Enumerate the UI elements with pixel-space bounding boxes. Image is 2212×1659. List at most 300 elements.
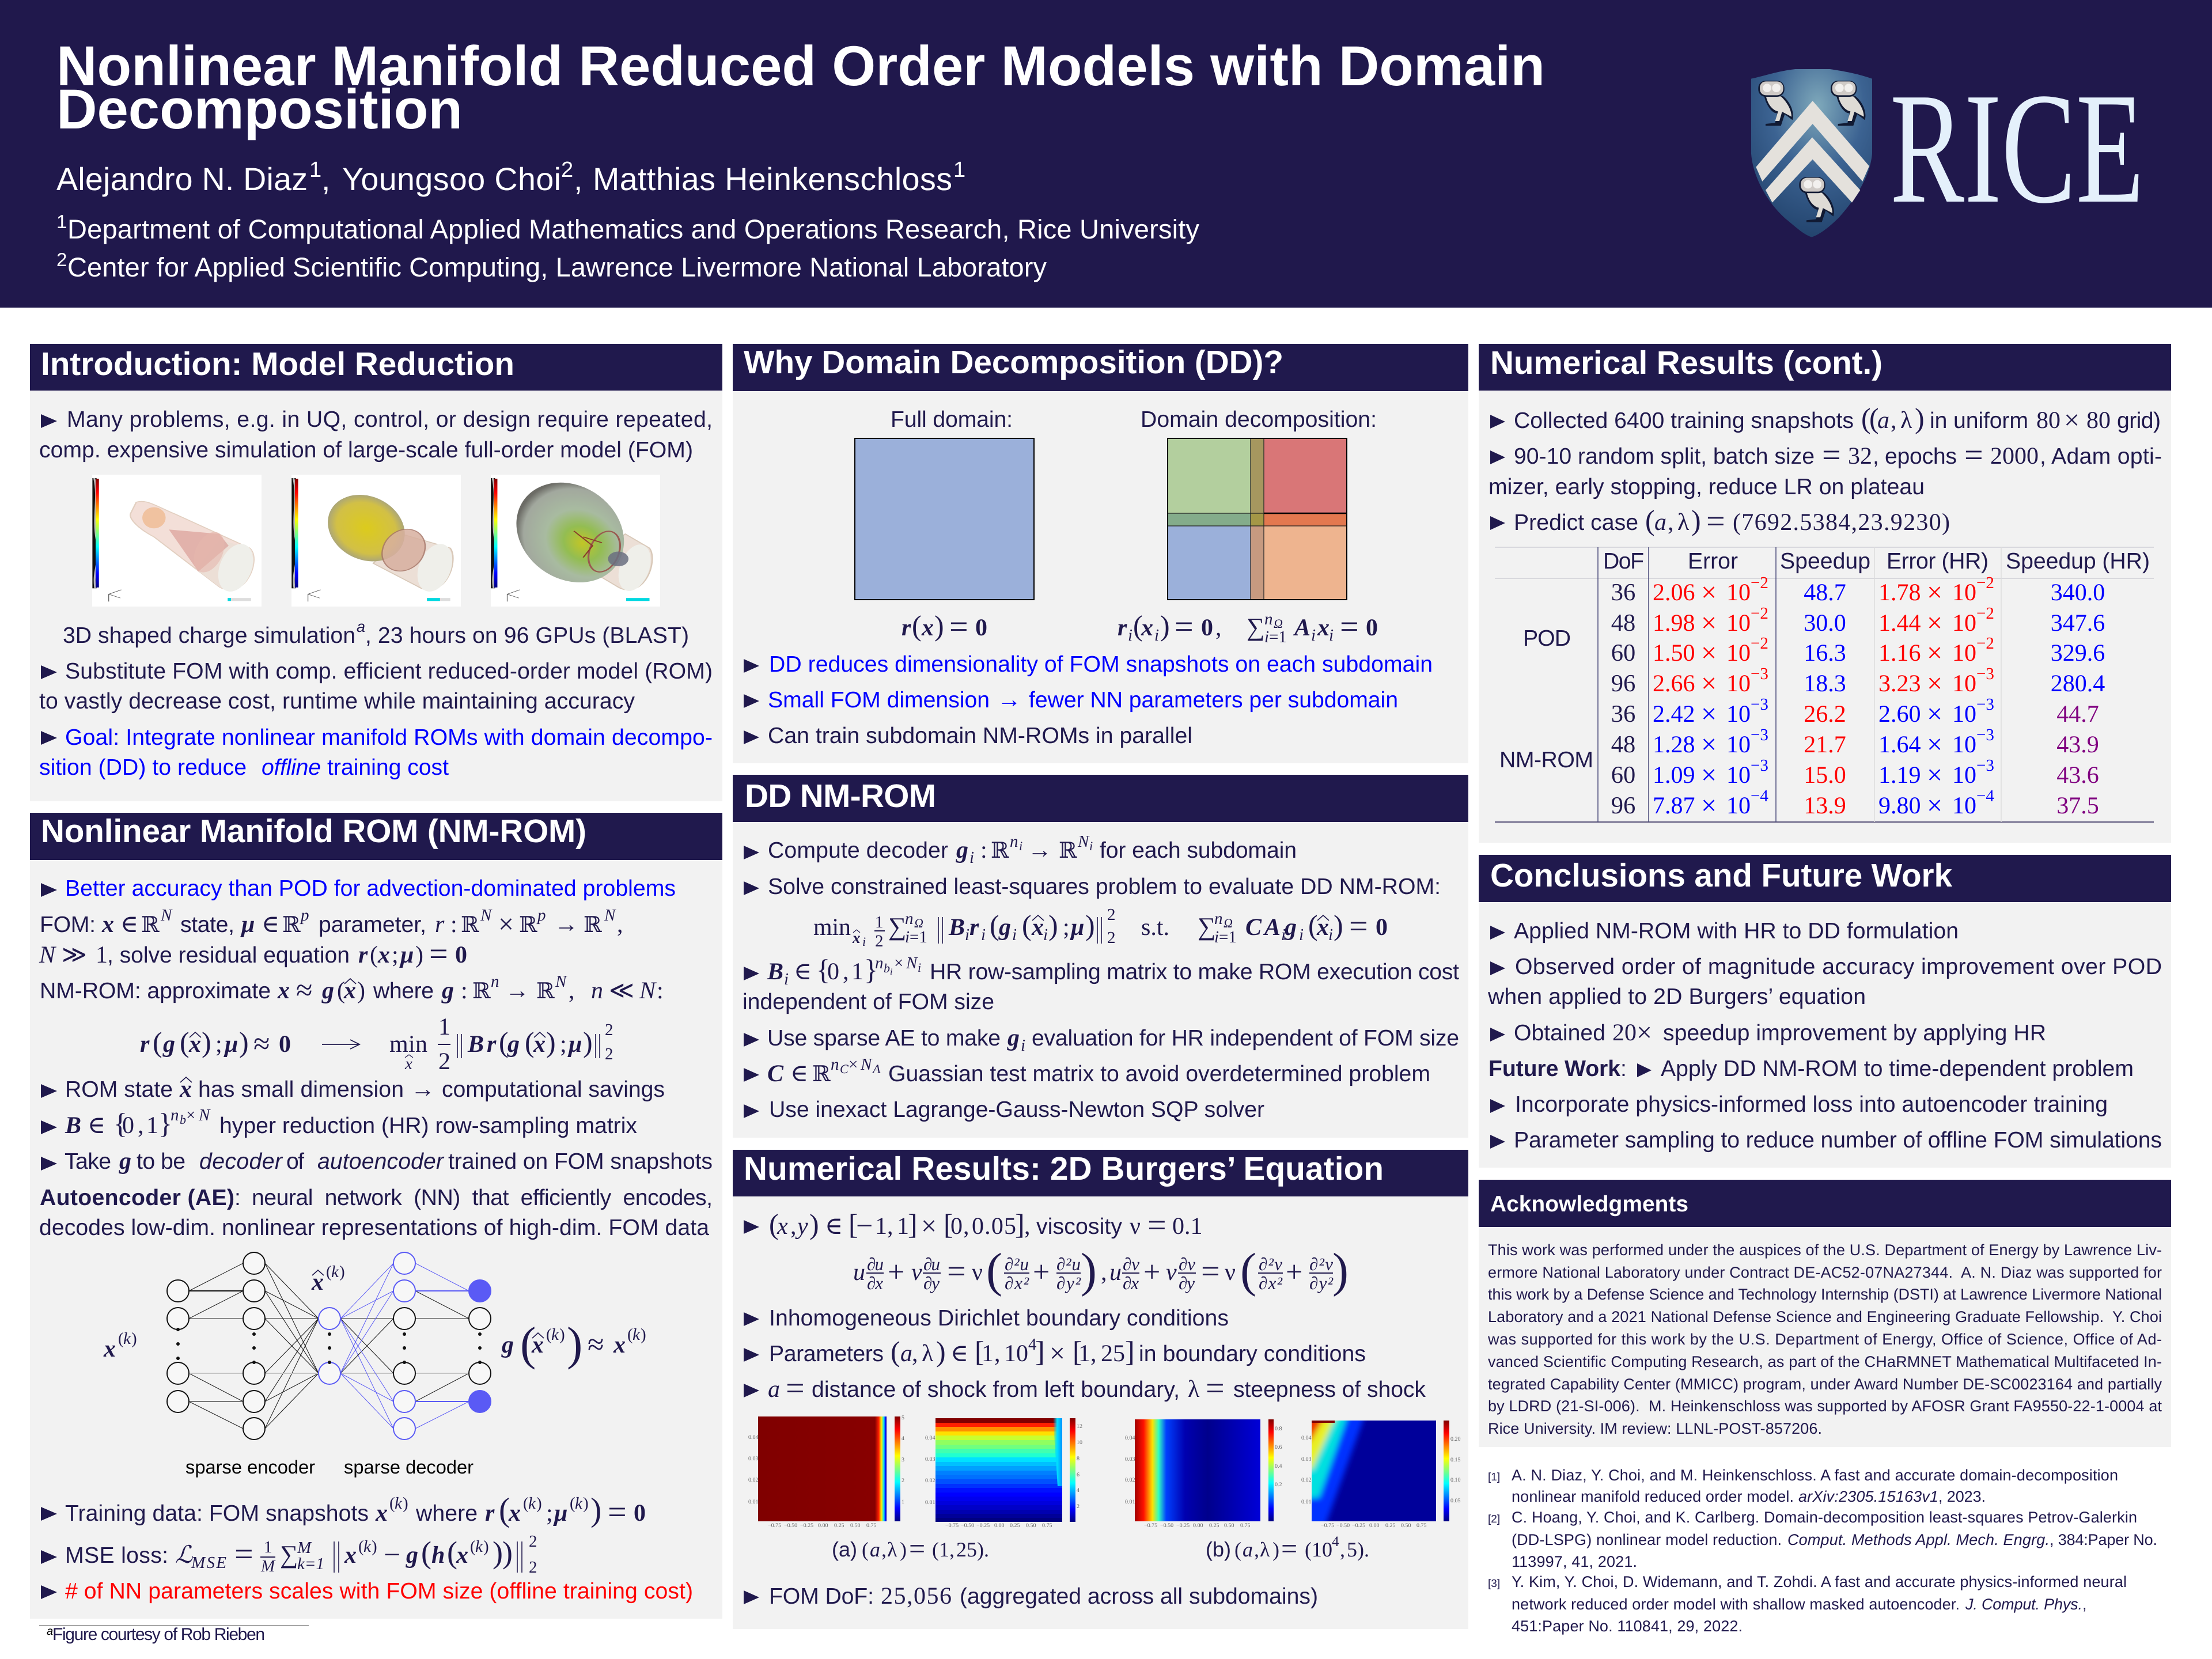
text: funding acknowledgment: was supported for this work by the U.S. Department of Energy, Office of Science, Office of Ad-: [1487, 1331, 2162, 1348]
table rows: error: −4: [1751, 787, 1768, 805]
chart: FOM solution v for case b: 0.04: [1301, 1435, 1311, 1441]
bullet: MSE loss: ): [372, 1537, 377, 1556]
text: FOM definition: parameter,: [319, 912, 426, 937]
equation: subdomain residual and interface constraint: x: [1317, 615, 1330, 641]
bullet: B_i sampling matrix: n: [875, 954, 884, 972]
bullet: parameters: [744, 1335, 1366, 1369]
figure label: domain decomposition: Domain decomposition:: [1141, 407, 1377, 432]
bullet: C test matrix: N: [860, 1055, 873, 1074]
equation: 2D Burgers equation: ∂v: [1179, 1254, 1195, 1274]
table rows: error with HR: −3: [1976, 726, 1994, 744]
reference 2: , 384:Paper No.: [2050, 1531, 2157, 1548]
equation: constrained least-squares problem: (: [1308, 909, 1318, 941]
table rows: error: 2.66: [1653, 671, 1695, 697]
bullet: training hyperparameters: ,: [1873, 444, 1879, 469]
bullet: B matrix: }: [158, 1107, 172, 1139]
chart: FOM solution v for case a: [925, 1418, 1082, 1529]
text: FOM definition: N: [480, 906, 493, 925]
text: future work: Apply DD NM-ROM to time-dependent problem: [1661, 1056, 2134, 1081]
table header: Speedup (HR): [2006, 549, 2150, 574]
equation: 2D Burgers equation: +: [1143, 1256, 1160, 1288]
bullet: repeated FOM simulation: comp. expensive simulation of large-scale full-order model (FOM): [39, 438, 693, 463]
header banner: [0, 0, 2212, 308]
text: funding acknowledgment: vanced Scientific Computing Research, as part of the CHaRMNET Mathematical Multifaceted In-: [1488, 1353, 2162, 1370]
equation: constrained least-squares problem: x: [852, 929, 861, 946]
bullet: decoder of autoencoder: decoder: [199, 1149, 283, 1174]
table rows: error with HR: −3: [1976, 695, 1994, 714]
equation: 2D Burgers equation: ∂x²: [1259, 1273, 1283, 1293]
equation: constrained least-squares problem: s.t.: [1141, 914, 1169, 941]
equation: 2D Burgers equation: +: [1286, 1256, 1302, 1288]
equation: 2D Burgers equation: ∂u: [923, 1254, 940, 1274]
equation: constrained least-squares problem: 2: [1107, 906, 1115, 924]
table rows: DoF: [1611, 579, 1635, 819]
figure label: full domain: Full domain:: [891, 407, 1013, 432]
table rows: error: 10: [1726, 671, 1751, 697]
label: input x(k): k: [123, 1330, 131, 1348]
figure caption: case b: (: [1234, 1538, 1241, 1561]
table rows: error with HR: −2: [1976, 604, 1994, 623]
bullet: compute decoder: i: [969, 849, 974, 867]
bullet: MSE loss: k: [363, 1537, 372, 1556]
affiliations: [56, 211, 1199, 282]
figure caption: case a: ,: [949, 1538, 955, 1561]
bullet: parameters: ]: [1125, 1335, 1135, 1368]
bullet: B_i sampling matrix: b: [884, 961, 890, 975]
table rows: error with HR: 1.78: [1878, 579, 1921, 606]
table rows: speedup with HR: 340.0: [2051, 579, 2105, 606]
bullet: goal: sition (DD) to reduce: [39, 755, 247, 780]
table rows: DoF: 96: [1611, 670, 1635, 697]
bullet: MSE loss: 1: [264, 1538, 272, 1556]
equation: least-squares residual minimization: ≈: [253, 1028, 270, 1060]
bullet: C test matrix: A: [872, 1062, 881, 1076]
table rows: error: −3: [1751, 756, 1768, 775]
label: decoder output approximates x(k): (: [520, 1317, 536, 1370]
bullet: parameters: ]: [1035, 1335, 1045, 1368]
equation: 2D Burgers equation: ,: [1101, 1259, 1107, 1286]
bullet: MSE loss: ): [493, 1535, 503, 1570]
bullet: parameters: ,: [1090, 1340, 1097, 1367]
text: FOM definition: ℝ: [584, 912, 602, 937]
text: FOM definition: p: [300, 906, 309, 925]
text: NM-ROM approximation: ≪: [609, 978, 634, 1004]
bullet: training snapshots: λ: [1900, 407, 1912, 434]
heading: Numerical Results cont: Numerical Results (cont.): [1490, 345, 1883, 381]
bullet: B_i sampling matrix: ×: [894, 954, 903, 972]
equation: least-squares residual minimization: ): [583, 1026, 593, 1058]
text: NM-ROM approximation: :: [657, 978, 664, 1004]
bullet: predict case: Predict case: [1514, 510, 1638, 535]
text: FOM definition: ∈: [262, 911, 279, 938]
authors: [56, 158, 965, 197]
table rows: speedup with HR: 347.6: [2051, 610, 2105, 637]
bullet: goal: offline: [262, 755, 321, 780]
chart: FOM solution u for case a: −0.50: [784, 1522, 797, 1529]
diagram: sparse autoencoder network: [167, 1252, 491, 1440]
bullet: training data: 0: [634, 1500, 646, 1527]
table rows: error with HR: 2.60: [1878, 701, 1921, 728]
bullet: ROM state: [41, 1076, 665, 1103]
bullet: domain and viscosity: ,: [1024, 1213, 1030, 1240]
equation: subdomain residual and interface constraint: =1: [1269, 628, 1287, 646]
bullet: parameters: 1: [982, 1340, 994, 1367]
bullet: training snapshots: Collected 6400 training snapshots: [1514, 408, 1854, 433]
bullet: training data: ): [403, 1494, 408, 1513]
bullet: B_i sampling matrix: 1: [851, 959, 863, 985]
bullet: fewer parameters: →: [997, 687, 1021, 713]
table rows: error: 1.98: [1653, 610, 1695, 637]
bullet: C test matrix: Guassian test matrix to avoid overdetermined problem: [888, 1062, 1430, 1086]
equation: subdomain residual and interface constraint: ,: [1215, 615, 1221, 641]
text: autoencoder definition: Autoencoder (AE): [40, 1185, 234, 1210]
chart: FOM solution u for case b: 0.02: [1125, 1477, 1135, 1483]
bullet: B matrix: ∈: [88, 1112, 105, 1139]
equation: least-squares residual minimization: (: [499, 1026, 509, 1058]
bullet: substitute FOM with ROM: to vastly decrease cost, runtime while maintaining accuracy: [39, 689, 635, 714]
table rows: error: −2: [1751, 574, 1768, 592]
equation: 2D Burgers equation: =: [1201, 1252, 1220, 1290]
text: FOM definition: ∈: [120, 911, 138, 938]
text: funding acknowledgment: tegrated Capability Center (MMICC) program, under Award Number DE-SC0023164 and partially: [1488, 1376, 2162, 1393]
bullet: MSE loss: ∑: [280, 1540, 298, 1569]
text: NM-ROM approximation: where: [373, 979, 434, 1003]
chart: FOM solution v for case a: −0.75: [945, 1522, 959, 1529]
bullet: training data: k: [575, 1494, 583, 1513]
authors: Youngsoo Choi: [342, 161, 561, 197]
bullet: training data: Training data: FOM snapshots: [65, 1501, 369, 1526]
text: FOM definition: r: [435, 911, 445, 938]
equation: 2D Burgers equation: ∂v: [1123, 1254, 1139, 1274]
table rows: error: 10: [1726, 701, 1751, 728]
equation: constrained least-squares problem: ): [1334, 909, 1343, 941]
bullet: MSE loss: h: [431, 1542, 445, 1569]
equation: 2D Burgers equation: v: [911, 1259, 922, 1286]
text: NM-ROM approximation: NM-ROM: approximate: [40, 979, 271, 1003]
text: FOM definition: ×: [498, 909, 514, 939]
heading: Acknowledgments: Acknowledgments: [1490, 1192, 1688, 1217]
equation: constrained least-squares problem: Ω: [1224, 916, 1233, 930]
bullet: speedup: Obtained: [1514, 1021, 1605, 1046]
bullet: shock parameters: a: [768, 1376, 780, 1403]
bullet: training data: r: [485, 1500, 495, 1527]
equation: constrained least-squares problem: =1: [910, 928, 927, 946]
label: decoder output approximates x(k): k: [632, 1325, 641, 1344]
equation: least-squares residual minimization: ): [239, 1026, 249, 1058]
bullet: decoder of autoencoder: Take: [65, 1149, 111, 1174]
bullet: parameters: ×: [1050, 1338, 1065, 1369]
bullet: training snapshots: ): [1915, 402, 1925, 434]
chart: FOM solution u for case b: 0.00: [1193, 1522, 1203, 1529]
table rows: error with HR: 1.64: [1878, 732, 1921, 758]
bullet: B_i sampling matrix: [743, 953, 1459, 1014]
equation: 2D Burgers equation: ν: [972, 1259, 983, 1286]
text: future work: :: [1620, 1056, 1627, 1081]
table rows: speedup: 13.9: [1804, 793, 1846, 819]
bullet: training snapshots: [1490, 402, 2161, 435]
label: sparse encoder and decoder: [185, 1456, 474, 1478]
equation: 2D Burgers equation: ∂²v: [1309, 1254, 1333, 1274]
table rows: speedup: 18.3: [1804, 671, 1846, 697]
reference 2: [1488, 1509, 2157, 1570]
figure caption: case b: 4: [1332, 1534, 1339, 1550]
row label: NM-ROM: NM-ROM: [1499, 748, 1593, 772]
bullet: training snapshots: ×: [2064, 404, 2080, 435]
chart: FOM solution u for case a: 0.00: [818, 1522, 828, 1529]
bullet: decoder of autoencoder: to be: [137, 1149, 185, 1174]
chart: FOM solution v for case b: 0.00: [1369, 1522, 1379, 1529]
text: funding acknowledgment: Rice University. IM review: LLNL-POST-857206.: [1488, 1420, 1822, 1437]
text: NM-ROM approximation: ,: [569, 978, 575, 1004]
table rows: speedup with HR: 44.7: [2056, 701, 2099, 728]
table: ROM results: [1495, 547, 2154, 822]
figure caption: case a: (a): [832, 1537, 857, 1561]
bullet: FOM DoF: FOM DoF:: [769, 1584, 874, 1609]
label: input x(k): ): [131, 1330, 137, 1348]
text: FOM definition: ℝ: [282, 912, 301, 937]
text: FOM definition: state,: [180, 912, 234, 937]
table rows: error: ×: [1701, 698, 1717, 729]
equation: constrained least-squares problem: 2: [1107, 929, 1115, 947]
table rows: error: 2.06: [1653, 579, 1695, 606]
text: FOM definition: ℝ: [461, 912, 479, 937]
text: FOM definition: ℝ: [519, 912, 537, 937]
equation: 2D Burgers equation: ∂u: [867, 1254, 884, 1274]
equation: subdomain residual and interface constraint: i: [1329, 626, 1334, 645]
bullet: B_i sampling matrix: HR row-sampling matrix to make ROM execution cost: [930, 960, 1459, 984]
equation: constrained least-squares problem: i: [965, 926, 969, 944]
reference 1: [1488, 1467, 2118, 1505]
equation: least-squares residual minimization: B: [467, 1031, 484, 1058]
bullet: B matrix: 1: [146, 1112, 158, 1139]
text: funding acknowledgment: This work was performed under the auspices of the U.S. Department of Energy by Lawrence Liv-: [1488, 1241, 2162, 1259]
bullet: domain and viscosity: viscosity: [1036, 1214, 1122, 1239]
bullet: parameters: in boundary conditions: [1139, 1342, 1366, 1366]
figure caption: case b: ,: [1254, 1538, 1259, 1561]
equation: 2D Burgers equation: (: [1240, 1244, 1256, 1297]
equation: 2D Burgers equation: ∂x²: [1005, 1273, 1029, 1293]
chart: FOM solution u for case b: [1125, 1419, 1282, 1529]
equation: 2D Burgers equation: ∂x: [867, 1273, 883, 1293]
text: funding acknowledgment: [1487, 1241, 2162, 1437]
figure: 3D shaped charge simulation snapshots: [92, 475, 660, 607]
equation: constrained least-squares problem: i: [1043, 926, 1048, 944]
chart: FOM solution v for case a: 2: [1077, 1503, 1080, 1510]
bullet: training snapshots: 80: [2036, 407, 2061, 434]
bullet: domain and viscosity: ν: [1130, 1213, 1141, 1240]
equation: least-squares residual minimization: (: [153, 1026, 162, 1058]
chart: FOM solution u for case b: 0.4: [1275, 1463, 1282, 1469]
table rows: error with HR: −3: [1976, 665, 1994, 683]
label: decoder output approximates x(k): ): [559, 1325, 565, 1344]
figure caption: case b: (10: [1305, 1538, 1332, 1561]
equation: full residual: 0: [975, 615, 987, 641]
equation: constrained least-squares problem: r: [969, 914, 979, 941]
table rows: error: −3: [1751, 695, 1768, 714]
chart: FOM solution v for case b: 0.75: [1416, 1522, 1426, 1529]
bullet: ROM state: has small dimension: [198, 1077, 404, 1102]
bullet: C test matrix: C: [767, 1060, 784, 1087]
bullet: parameters: 10: [1004, 1340, 1028, 1367]
bullet: ROM state: ROM state: [65, 1077, 173, 1102]
bullet: parameters: [: [975, 1335, 984, 1368]
affiliations: Center for Applied Scientific Computing, Lawrence Livermore National Laboratory: [67, 252, 1047, 282]
equation: least-squares residual minimization: g: [507, 1031, 520, 1058]
table rows: error: 1.28: [1653, 732, 1695, 758]
bullet: training data: ): [590, 1491, 601, 1528]
label: input x(k): x: [103, 1336, 116, 1362]
table rows: error with HR: 3.23: [1878, 671, 1921, 697]
bullet: B matrix: N: [198, 1106, 211, 1124]
bullet: MSE loss: (: [421, 1535, 431, 1570]
text: FOM definition: →: [554, 911, 578, 938]
bullet: predict case: ,: [1668, 509, 1674, 536]
figure caption: case a: [832, 1532, 989, 1565]
figure caption: shaped charge: [63, 618, 689, 648]
table rows: error with HR: 9.80: [1878, 793, 1921, 819]
equation: least-squares residual minimization: μ: [224, 1031, 238, 1058]
bullet: domain and viscosity: ]: [908, 1208, 918, 1240]
chart: FOM solution v for case a: 8: [1077, 1456, 1080, 1462]
table rows: error with HR: 10: [1952, 640, 1976, 666]
authors: ,: [574, 161, 582, 197]
bullet: domain and viscosity: [: [944, 1208, 953, 1240]
chart: FOM solution v for case a: 0.25: [1010, 1522, 1020, 1529]
chart: FOM solution v for case b: 0.20: [1450, 1436, 1461, 1442]
text: FOM definition: μ: [399, 942, 414, 968]
equation: 2D Burgers equation: ∂y²: [1056, 1273, 1081, 1293]
bullet: boundary conditions: Inhomogeneous Dirichlet boundary conditions: [769, 1306, 1229, 1331]
equation: subdomain residual and interface constraint: i: [1264, 628, 1269, 646]
text: NM-ROM approximation: x: [277, 978, 290, 1004]
text: FOM definition: ;: [392, 942, 399, 968]
text: FOM definition: N: [160, 906, 173, 925]
table rows: error: −2: [1751, 634, 1768, 653]
equation: 2D Burgers equation: +: [1033, 1256, 1050, 1288]
reference 2: (DD-LSPG) nonlinear model reduction.: [1512, 1531, 1782, 1548]
chart: FOM solution u for case b: 0.8: [1275, 1426, 1282, 1432]
bullet: sparse AE: evaluation for HR independent of FOM size: [1032, 1026, 1459, 1051]
chart: FOM solution u for case a: −0.25: [800, 1522, 813, 1529]
table rows: error: ×: [1701, 637, 1717, 668]
bullet: C test matrix: n: [831, 1055, 839, 1074]
equation: full residual: (: [912, 609, 922, 642]
chart: FOM solution v for case b: 0.10: [1450, 1477, 1461, 1483]
equation: constrained least-squares problem: μ: [1070, 914, 1084, 941]
bullet: training hyperparameters: 90-10 random split, batch size: [1514, 444, 1815, 469]
equation: subdomain residual and interface constraint: ∑: [1247, 613, 1264, 641]
label: latent x-hat(k): ): [339, 1263, 345, 1281]
equation: least-squares residual minimization: 2: [438, 1048, 450, 1075]
table rows: error: ×: [1701, 577, 1717, 607]
bullet: MSE loss: k: [475, 1537, 483, 1556]
affiliations: 2: [56, 249, 67, 270]
bullet: parameters: (: [891, 1335, 900, 1368]
bullet: parallel training: Can train subdomain NM-ROMs in parallel: [768, 724, 1192, 748]
text: NM-ROM approximation: →: [505, 978, 529, 1004]
bullet: decoder of autoencoder: g: [119, 1148, 131, 1175]
table rows: error with HR: ×: [1927, 759, 1942, 790]
equation: constrained least-squares problem: i: [905, 928, 910, 946]
bullet: B_i sampling matrix: N: [906, 954, 918, 972]
bullet: training snapshots: in uniform: [1930, 408, 2028, 433]
chart: FOM solution u for case b: 0.25: [1209, 1522, 1219, 1529]
table rows: error: −3: [1751, 726, 1768, 744]
table rows: speedup: [1804, 579, 1846, 819]
label: decoder output approximates x(k): (: [546, 1325, 552, 1344]
label: input x(k): (: [118, 1330, 124, 1348]
text: NM-ROM approximation: :: [461, 978, 468, 1004]
table rows: error with HR: ×: [1927, 637, 1942, 668]
equation: subdomain residual and interface constraint: =: [1175, 608, 1194, 645]
table rows: DoF: 60: [1611, 762, 1635, 789]
bullet: SQP solver: Use inexact Lagrange-Gauss-Newton SQP solver: [769, 1097, 1264, 1122]
bullet: B matrix: hyper reduction (HR) row-sampling matrix: [219, 1113, 637, 1138]
equation: full residual: x: [921, 615, 934, 641]
bullet: predict case: a: [1654, 509, 1666, 536]
text: FOM definition: ): [415, 942, 423, 968]
chart: FOM solution v for case b: −0.50: [1336, 1522, 1350, 1529]
bullet: decoder of autoencoder: autoencoder: [317, 1149, 445, 1174]
bullet: predict case: =: [1706, 502, 1725, 540]
equation: constrained least-squares problem: ;: [1063, 914, 1070, 941]
equation: full residual: r: [902, 615, 911, 641]
bullet: domain and viscosity: 1: [875, 1213, 887, 1240]
equation: subdomain residual and interface constraint: r: [1118, 615, 1127, 641]
bullet: shock parameters: =: [1206, 1369, 1225, 1407]
table rows: speedup: 26.2: [1804, 701, 1846, 728]
references: [1488, 1467, 2157, 1635]
chart: FOM solution v for case b: 0.01: [1301, 1499, 1311, 1505]
figure caption: case a: ,: [881, 1538, 887, 1561]
label: latent x-hat(k): (: [326, 1263, 332, 1281]
table rows: error: ×: [1701, 729, 1717, 759]
bullet: parameters: 1: [1078, 1340, 1090, 1367]
table rows: speedup with HR: [2051, 579, 2105, 819]
affiliations: Department of Computational Applied Mathematics and Operations Research, Rice University: [67, 214, 1199, 244]
equation: constrained least-squares problem: ∑: [888, 912, 906, 941]
bullet: accuracy improvement: when applied to 2D Burgers’ equation: [1487, 984, 1866, 1009]
bullet: MSE loss: 2: [529, 1532, 537, 1551]
bullet: MSE loss: M: [297, 1539, 312, 1557]
bullet: domain and viscosity: [: [849, 1208, 858, 1240]
bullet: MSE loss: (: [358, 1537, 364, 1556]
equation: constrained least-squares problem: ): [1085, 909, 1095, 941]
network ellipsis dots: [176, 1328, 482, 1364]
equation: constrained least-squares problem: x: [1031, 914, 1044, 941]
chart: FOM solution u for case b: 0.2: [1275, 1482, 1282, 1488]
equation: constrained least-squares problem: i: [1299, 926, 1304, 944]
panel: Acknowledgments: [1479, 1180, 2171, 1447]
label: decoder output approximates x(k): g: [501, 1332, 514, 1358]
equation: subdomain residual and interface constraint: i: [1311, 626, 1316, 645]
bullet: decoder of autoencoder: of: [286, 1149, 304, 1174]
chart: FOM solution v for case a: 4: [1077, 1487, 1080, 1494]
figure caption: case b: [1206, 1532, 1369, 1565]
bullet: compute decoder: Compute decoder: [768, 838, 948, 863]
table rows: speedup: 15.0: [1804, 762, 1846, 789]
bullet: B_i sampling matrix: i: [890, 967, 892, 977]
bullet: decoder of autoencoder: trained on FOM snapshots: [448, 1149, 713, 1174]
bullet: domain and viscosity: ]: [1015, 1208, 1025, 1240]
table rows: error with HR: 10: [1952, 610, 1976, 637]
equation: 2D Burgers equation: ): [1081, 1244, 1097, 1297]
text: autoencoder definition: :: [234, 1185, 241, 1210]
bullet: B_i sampling matrix: B: [767, 959, 783, 985]
text: FOM definition: x: [101, 911, 114, 938]
label: decoder output approximates x(k): [501, 1317, 646, 1370]
text: NM-ROM approximation: N: [639, 978, 657, 1004]
